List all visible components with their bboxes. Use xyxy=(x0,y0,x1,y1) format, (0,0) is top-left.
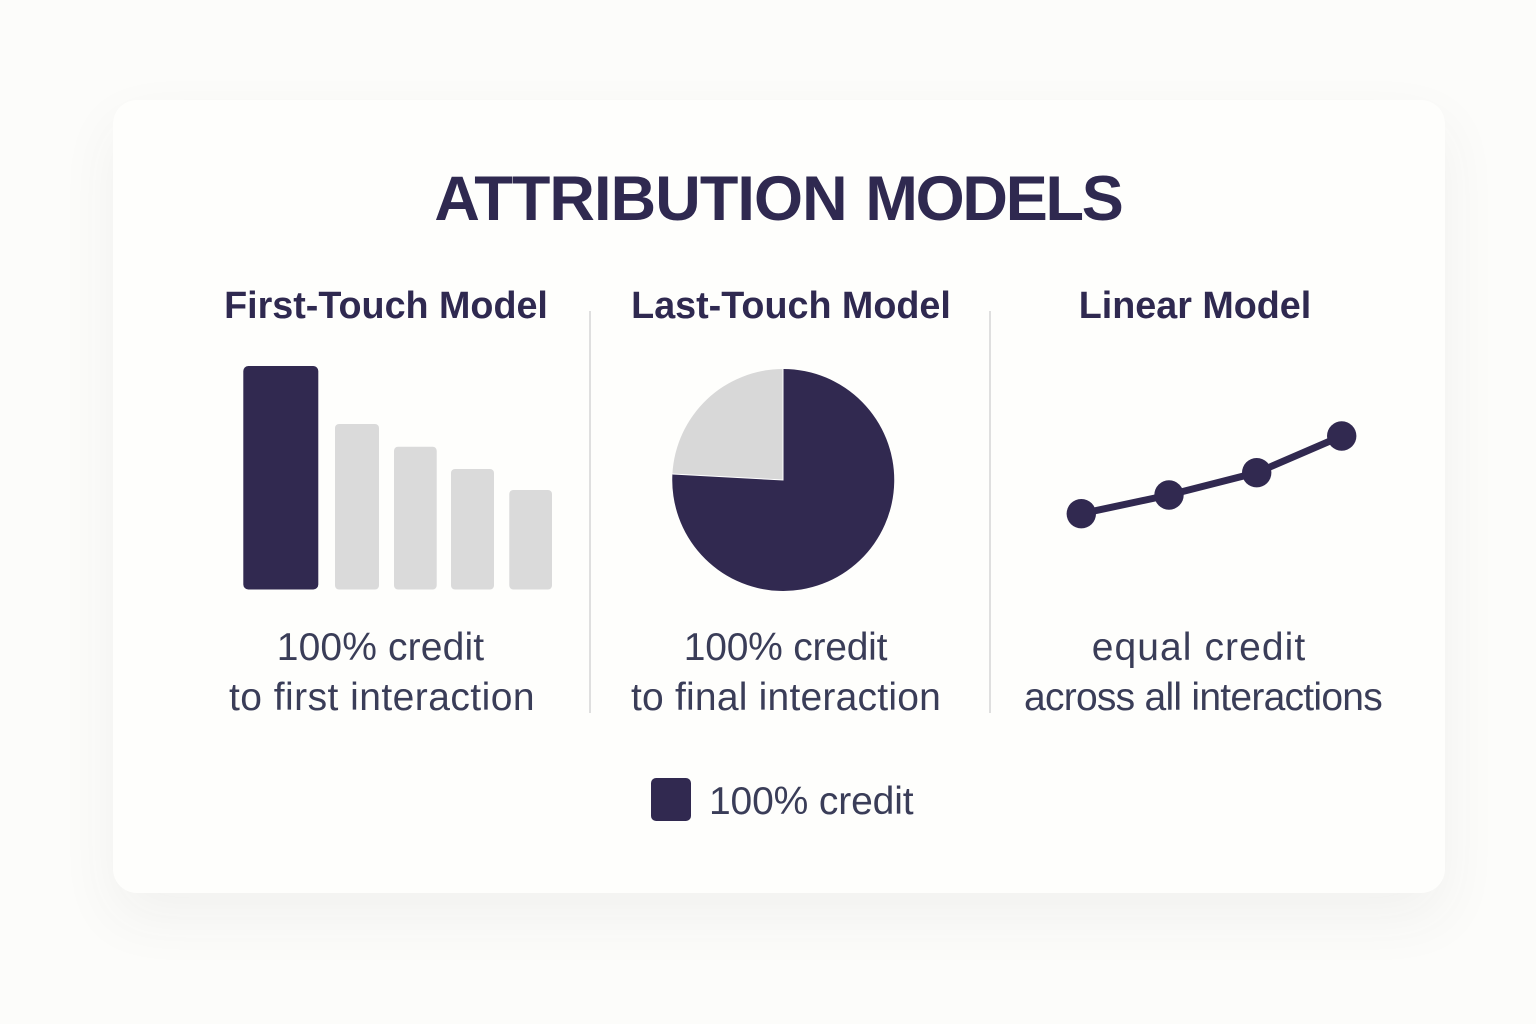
description: linear: across all interactions xyxy=(1024,676,1382,719)
description: last-touch: 100% credit xyxy=(684,626,887,669)
description: linear xyxy=(1024,626,1382,719)
description: last-touch xyxy=(631,626,941,719)
legend label: 100% credit xyxy=(709,780,913,822)
divider xyxy=(989,311,991,713)
pie chart: last-touch xyxy=(672,369,894,591)
heading: linear model: Linear Model xyxy=(1079,284,1311,326)
heading: last-touch model: Last-Touch Model xyxy=(631,284,951,326)
description: last-touch: to final interaction xyxy=(631,676,941,719)
divider xyxy=(589,311,591,713)
description: first-touch: to first interaction xyxy=(229,676,535,719)
heading: first-touch model: First-Touch Model xyxy=(224,284,548,326)
title: ATTRIBUTION MODELS xyxy=(434,164,1122,234)
description: first-touch xyxy=(229,626,535,719)
panel: card xyxy=(113,100,1445,893)
description: first-touch: 100% credit xyxy=(277,626,484,669)
legend xyxy=(651,778,914,822)
legend swatch xyxy=(651,778,691,821)
description: linear: equal credit xyxy=(1092,626,1306,669)
line chart: linear xyxy=(1066,421,1356,528)
bar chart: first-touch xyxy=(243,366,552,590)
